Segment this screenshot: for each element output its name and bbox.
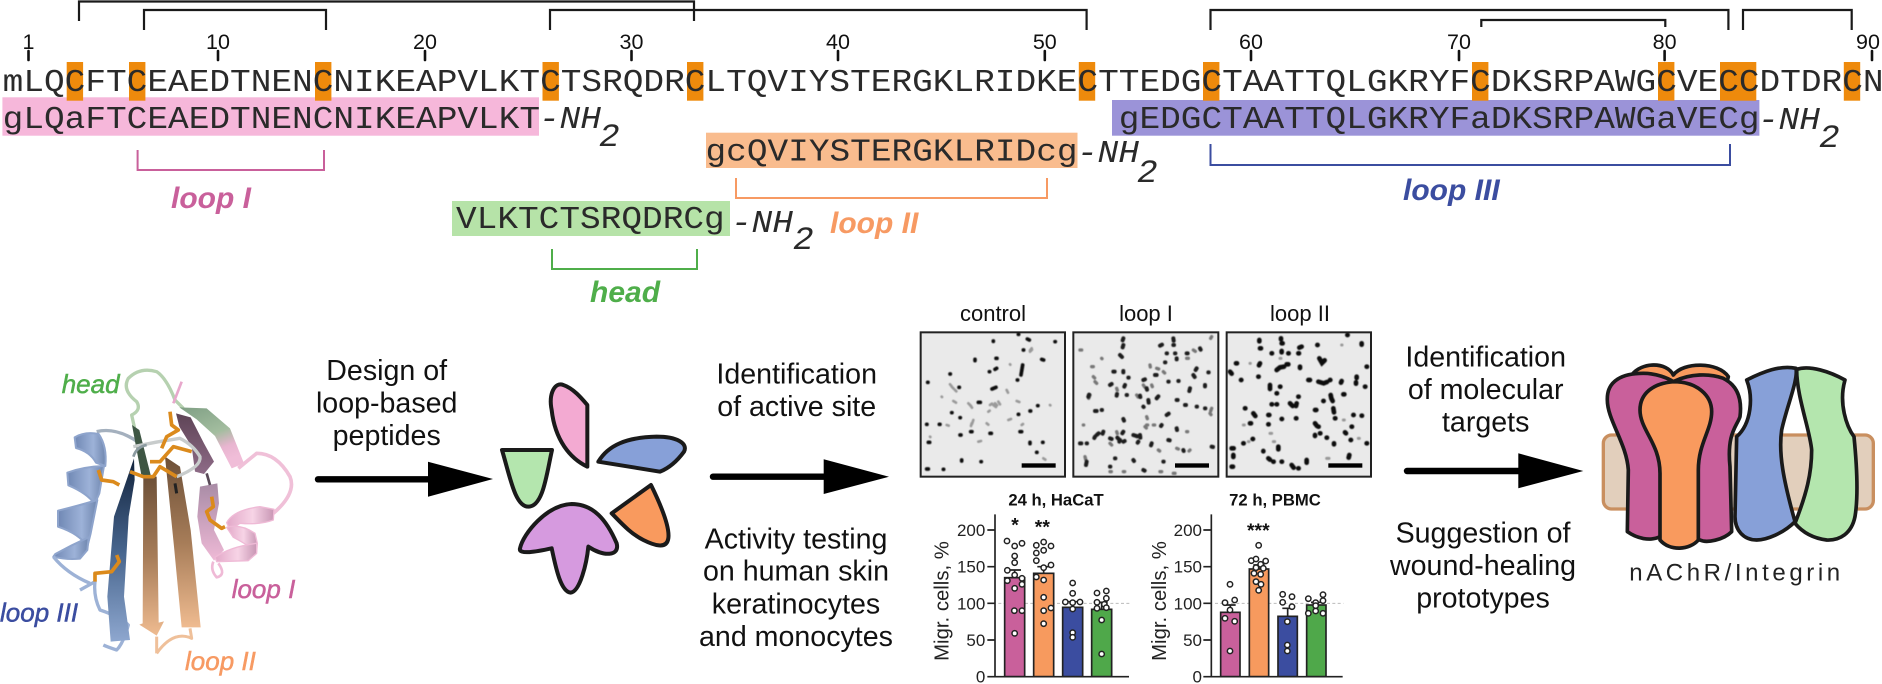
peptide sequence: head: -NH xyxy=(731,206,793,241)
chart: 24 h HaCaT xyxy=(931,491,1130,684)
peptide highlight: loop III xyxy=(1112,100,1759,136)
significance stars: * xyxy=(1011,516,1019,537)
bars xyxy=(1005,567,1112,677)
text: activity testing: Activity testing xyxy=(705,524,887,556)
micrograph: loop II xyxy=(1227,332,1371,477)
peptide sequence: loop I: -NH xyxy=(539,102,601,137)
peptide sequence: loop III: 2 xyxy=(1819,121,1840,158)
text: suggestion of prototypes: wound-healing xyxy=(1389,550,1576,582)
bracket and label: loop III: loop III xyxy=(1403,174,1500,207)
y axis ticks xyxy=(957,521,985,684)
y axis ticks: 200 xyxy=(957,521,985,540)
text: activity testing: keratinocytes xyxy=(712,588,880,620)
micrograph: control xyxy=(921,332,1065,477)
y axis ticks: 150 xyxy=(1174,558,1202,577)
arrow: identification xyxy=(713,459,889,494)
residue number ruler: 20 xyxy=(413,30,437,54)
residue number ruler: 70 xyxy=(1447,30,1471,54)
micrograph panels xyxy=(921,332,1371,477)
text: activity testing: on human skin xyxy=(703,556,889,588)
cysteine highlights xyxy=(67,62,1860,101)
full sequence: mLQCFTCEAEDTNENCNIKEAPVLKTCTSRQDRCLTQVIYSTERGKLRIDKECTTEDGCTAATTQLGKRYFCDKSRPAWGCVECCDTDRCN xyxy=(3,64,1882,101)
arrow: targets xyxy=(1407,453,1583,488)
arrow: design xyxy=(318,462,493,497)
peptide sequence: loop III xyxy=(1119,101,1840,158)
residue number ruler: 40 xyxy=(826,30,850,54)
micrograph titles xyxy=(960,301,1330,326)
peptide sequence: loop II: 2 xyxy=(1137,156,1158,193)
text: activity testing: and monocytes xyxy=(699,621,893,653)
bracket and label: loop III xyxy=(1210,144,1730,207)
peptide sequence: loop III: -NH xyxy=(1758,103,1820,138)
peptide sequence: head: VLKTCTSRQDRCg xyxy=(456,201,725,238)
text: identification of molecular targets: Identification xyxy=(1405,342,1566,374)
nAChR receptor xyxy=(1607,365,1741,548)
peptide highlight: loop I xyxy=(2,97,539,136)
receptor icon: nAChR and integrin xyxy=(1603,365,1873,548)
protein label: loop III: loop III xyxy=(0,598,78,628)
peptide sequence: head: 2 xyxy=(793,223,814,260)
y axis ticks: 100 xyxy=(957,594,985,613)
y axis ticks xyxy=(1174,521,1202,684)
residue number ruler xyxy=(23,30,1880,60)
bracket and label: loop II: loop II xyxy=(830,207,919,240)
y axis ticks: 200 xyxy=(1174,521,1202,540)
residue number ruler: 60 xyxy=(1239,30,1263,54)
text: design of loop-based peptides: peptides xyxy=(333,420,441,452)
chart title: 72 h, PBMC xyxy=(1229,491,1321,510)
bracket and label: loop I xyxy=(138,150,324,215)
peptide highlight: loop II xyxy=(706,133,1078,168)
peptide highlight: head xyxy=(452,201,730,236)
significance stars: ** xyxy=(1035,518,1050,539)
micrograph titles: loop II xyxy=(1270,301,1330,326)
y axis label: Migr. cells, % xyxy=(931,541,953,661)
text: design of loop-based peptides: loop-based xyxy=(316,388,457,420)
peptide sequence: loop III: gEDGCTAATTQLGKRYFaDKSRPAWGaVECg xyxy=(1119,101,1760,138)
text: identification of molecular targets: of molecular xyxy=(1408,374,1564,406)
residue number ruler: 1 xyxy=(23,30,34,54)
micrograph: loop I xyxy=(1073,332,1218,477)
significance stars xyxy=(1011,516,1050,539)
text: identification of active site: Identification xyxy=(716,358,877,390)
peptide sequence: loop II xyxy=(706,134,1158,193)
y axis ticks: 100 xyxy=(1174,594,1202,613)
peptide sequence: loop II: -NH xyxy=(1077,136,1139,171)
significance stars: *** xyxy=(1247,521,1270,542)
y axis ticks: 50 xyxy=(966,631,985,650)
text: identification of active site xyxy=(716,358,877,423)
residue number ruler: 10 xyxy=(206,30,230,54)
text: identification of active site: of active site xyxy=(717,391,876,423)
chart title: 24 h, HaCaT xyxy=(1008,491,1104,510)
peptide sequence: loop I: gLQaFTCEAEDTNENCNIKEAPVLKT xyxy=(3,101,540,138)
bracket and label: head xyxy=(552,249,697,309)
y axis ticks: 150 xyxy=(957,558,985,577)
data points xyxy=(1004,538,1109,657)
micrograph titles: loop I xyxy=(1119,301,1173,326)
protein label: head: head xyxy=(62,369,121,399)
text: identification of molecular targets xyxy=(1405,342,1566,439)
residue number ruler: 90 xyxy=(1856,30,1880,54)
y axis label: Migr. cells, % xyxy=(1149,541,1171,661)
text: suggestion of prototypes: prototypes xyxy=(1416,582,1550,614)
residue number ruler: 80 xyxy=(1653,30,1677,54)
protein label: loop II: loop II xyxy=(185,646,256,676)
text: activity testing xyxy=(699,524,893,653)
text: suggestion of prototypes xyxy=(1389,518,1576,614)
peptide sequence: head xyxy=(456,201,814,260)
data points xyxy=(1222,543,1326,654)
bracket and label: loop I: loop I xyxy=(171,182,252,215)
residue number ruler: 30 xyxy=(620,30,643,54)
chart: 72 h PBMC xyxy=(1149,491,1343,684)
disulfide bond brackets xyxy=(79,2,1852,30)
integrin receptor xyxy=(1735,367,1857,540)
text: design of loop-based peptides xyxy=(316,355,457,452)
text: suggestion of prototypes: Suggestion of xyxy=(1396,518,1570,550)
bracket and label: head: head xyxy=(590,276,661,309)
protein ribbon structure xyxy=(53,370,291,653)
bracket and label: loop II xyxy=(736,178,1047,240)
bars xyxy=(1221,565,1326,677)
text: identification of molecular targets: targets xyxy=(1442,407,1529,439)
residue number ruler: 50 xyxy=(1033,30,1057,54)
y axis ticks: 50 xyxy=(1183,631,1202,650)
peptide sequence: loop II: gcQVIYSTERGKLRIDcg xyxy=(706,134,1078,170)
membrane xyxy=(1603,435,1873,509)
micrograph titles: control xyxy=(960,301,1026,326)
receptor label: nAChR/Integrin xyxy=(1629,560,1844,587)
peptide sequence: loop I xyxy=(3,101,620,157)
peptide sequence: loop I: 2 xyxy=(599,120,620,157)
protein label: loop I: loop I xyxy=(232,574,295,604)
text: design of loop-based peptides: Design of xyxy=(326,355,447,387)
peptide fragments icon xyxy=(502,384,685,593)
